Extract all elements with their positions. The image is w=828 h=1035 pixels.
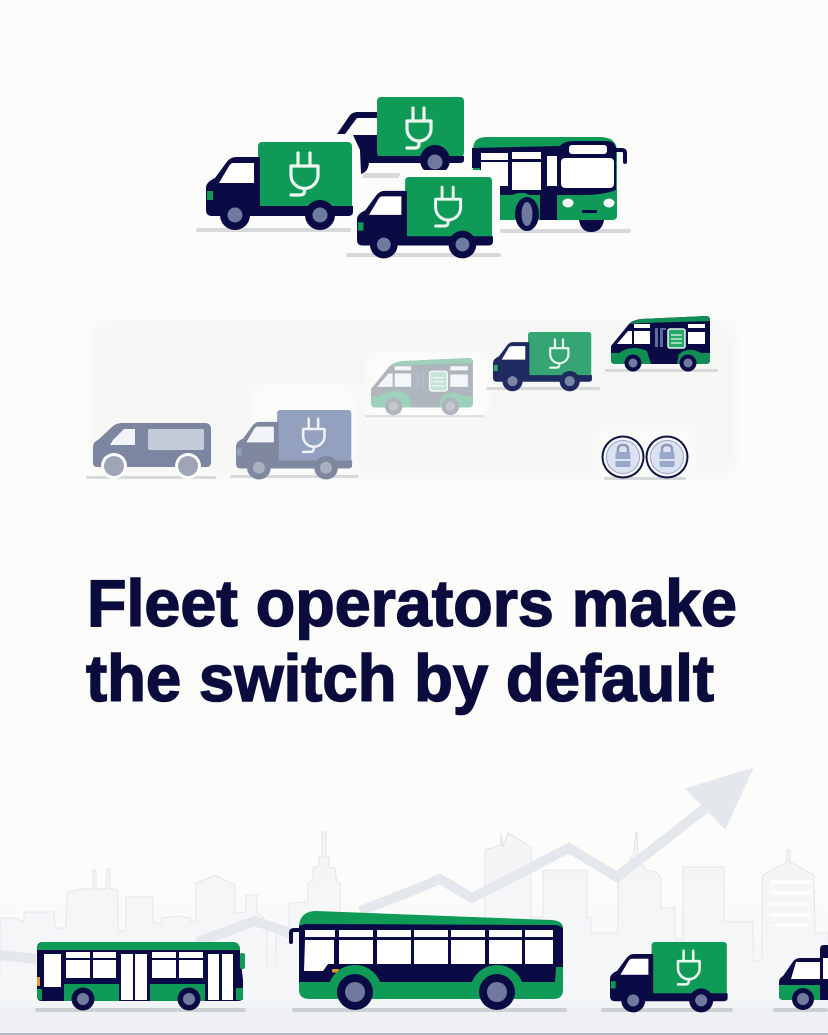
panel background <box>92 319 738 476</box>
stage 5: dark electric minibus <box>605 316 718 372</box>
stage 2: grey electric truck <box>230 410 359 480</box>
road vehicles <box>35 911 828 1012</box>
green city bus front view <box>472 137 625 232</box>
ghost highlight behind vehicle <box>254 384 354 476</box>
growth arrow <box>0 769 752 959</box>
shadow under fleet group <box>196 173 631 257</box>
coins with padlocks <box>602 436 688 480</box>
partial vehicle at right edge <box>773 945 828 1012</box>
title: Fleet operators make <box>87 566 737 640</box>
road <box>0 1008 828 1035</box>
stage 3: faded minibus <box>365 358 485 418</box>
title: the switch by default <box>86 641 714 715</box>
rear green electric truck <box>337 97 464 178</box>
title <box>86 566 737 715</box>
panel: adoption progression <box>86 316 738 480</box>
city skyline <box>0 832 828 1000</box>
front green electric truck <box>355 174 496 258</box>
left green city bus <box>35 942 246 1012</box>
green electric truck on road <box>601 942 733 1012</box>
skyline window stripes <box>770 880 811 926</box>
highlight behind coins <box>595 425 695 477</box>
stage 1: grey van <box>86 423 216 479</box>
left green electric truck <box>206 139 355 230</box>
large green city bus <box>291 911 567 1012</box>
ground haze <box>0 880 828 1008</box>
stage 4: green electric truck <box>486 332 600 391</box>
illustration: electric fleet group <box>196 97 631 258</box>
highlight behind vehicles <box>368 352 488 418</box>
